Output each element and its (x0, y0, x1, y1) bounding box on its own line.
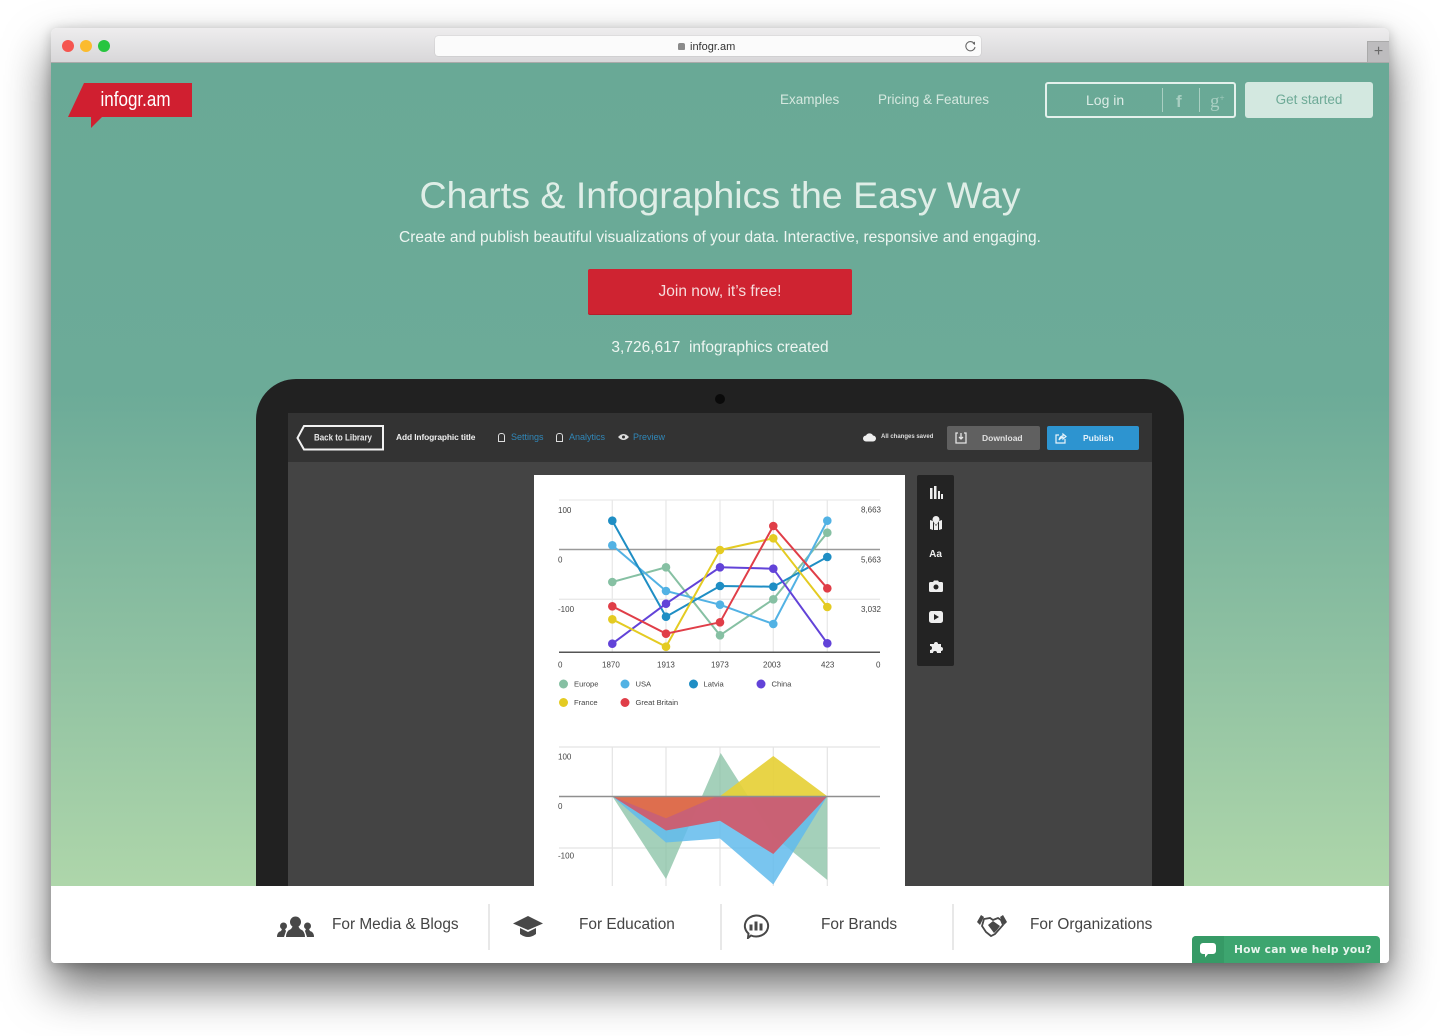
window control: close (62, 40, 74, 52)
area chart axis labels (558, 752, 575, 860)
chart axis labels: 5,663 (861, 556, 882, 564)
icon: puzzle tool (930, 642, 943, 653)
chart axis labels: 8,663 (861, 506, 882, 514)
settings link (498, 432, 544, 442)
series: USA (608, 517, 831, 628)
analytics link (556, 432, 605, 442)
nav divider two (720, 904, 722, 950)
chart axis labels: -100 (558, 605, 575, 614)
get started button (1245, 82, 1373, 118)
chart axis labels: 0 (558, 556, 563, 564)
area chart (558, 746, 880, 886)
chart legend: Great Britain (636, 698, 678, 707)
label: for education: For Education (579, 916, 675, 933)
cloud icon (863, 433, 876, 442)
analytics label: Analytics (569, 432, 605, 442)
back to library button (296, 425, 384, 450)
lock icon (678, 43, 685, 50)
area: USA (612, 796, 827, 884)
series: Europe (608, 529, 831, 639)
publish icon (1055, 432, 1067, 444)
new tab button (1367, 41, 1389, 62)
nav divider one (488, 904, 490, 950)
reload icon (965, 41, 976, 52)
subheadline: Create and publish beautiful visualizations of your data. Interactive, responsive and engaging. (399, 229, 1041, 246)
chart legend: France (574, 698, 598, 707)
chart axis labels: 1870 (602, 660, 620, 670)
area: Great Britain (612, 796, 827, 854)
settings label: Settings (511, 432, 544, 442)
download button (947, 426, 1040, 450)
divider (1162, 88, 1163, 112)
area: France (720, 756, 827, 796)
chart axis labels: 3,032 (861, 605, 882, 614)
webcam (715, 394, 725, 404)
publish label: Publish (1083, 433, 1114, 443)
chart axis labels: 1913 (657, 660, 675, 670)
logo (68, 83, 192, 128)
line chart (558, 500, 882, 707)
chat label: How can we help you? (1234, 943, 1372, 956)
hero section with gradient background (51, 63, 1389, 886)
headline: Charts & Infographics the Easy Way (420, 174, 1020, 216)
nav: pricing and features: Pricing & Features (878, 92, 989, 107)
call to action button (588, 269, 852, 314)
area: Europe (612, 753, 827, 880)
icon: map tool (930, 516, 942, 530)
chart axis labels: 0 (558, 660, 563, 670)
address bar (435, 36, 981, 56)
download label: Download (982, 433, 1023, 443)
chart legend (559, 680, 792, 707)
label: for organizations: For Organizations (1030, 916, 1152, 933)
chart legend: China (772, 680, 792, 688)
chart legend: USA (636, 680, 652, 688)
chart legend: Latvia (704, 680, 725, 688)
icon: organizations handshake (977, 915, 1007, 938)
label: for media and blogs: For Media & Blogs (332, 916, 459, 933)
publish button (1047, 426, 1139, 450)
get started button: Get started (1276, 92, 1342, 107)
chart axis labels (558, 506, 882, 670)
analytics icon (556, 433, 563, 442)
preview label: Preview (633, 432, 665, 442)
back to library button: Back to Library (314, 432, 372, 442)
chart axis labels: 2003 (763, 660, 781, 670)
facebook icon: f (1176, 92, 1182, 111)
series: Latvia (608, 517, 831, 620)
icon: media and blogs people (277, 916, 314, 937)
google plus icon: g+ (1210, 91, 1225, 112)
icon: brands speech chart (744, 914, 770, 939)
audience navigation bar (51, 886, 1389, 963)
download icon (955, 432, 967, 444)
infographics counter: 3,726,617 infographics created (611, 339, 829, 356)
login button group (1045, 82, 1236, 118)
series: Great Britain (608, 522, 831, 638)
divider (1199, 88, 1200, 112)
preview link (618, 432, 665, 442)
saved label: All changes saved (881, 434, 933, 440)
infographic title: Add Infographic title (396, 432, 475, 442)
side tool palette (917, 475, 954, 666)
chart legend: Europe (574, 680, 598, 688)
chart axis labels: 0 (876, 660, 881, 670)
area chart axis labels: 0 (558, 802, 563, 811)
settings icon (498, 433, 505, 442)
icon: video tool (929, 611, 943, 623)
icon: camera tool (929, 580, 943, 592)
new tab button: + (1374, 43, 1383, 60)
app screen (288, 413, 1152, 886)
chart axis labels: 423 (821, 660, 835, 670)
browser title bar (51, 28, 1389, 63)
nav: examples: Examples (780, 92, 839, 107)
area chart axis labels: -100 (558, 852, 575, 860)
nav divider three (952, 904, 954, 950)
window control: minimize (80, 40, 92, 52)
series: China (608, 564, 831, 648)
icon: chart tool (930, 486, 943, 499)
preview icon (618, 434, 629, 440)
logo: infogr.am (100, 89, 170, 111)
laptop mockup (256, 379, 1184, 886)
window control: zoom (98, 40, 110, 52)
area chart axis labels: 100 (558, 752, 572, 762)
icon: education cap (513, 916, 543, 937)
label: for brands: For Brands (821, 916, 897, 933)
icon: text tool: Aa (929, 549, 942, 560)
saved status (863, 433, 933, 442)
url text: infogr.am (690, 41, 735, 53)
chart axis labels: 1973 (711, 660, 729, 670)
area: overlap (612, 796, 717, 818)
app toolbar (288, 413, 1152, 462)
white infographic canvas (534, 475, 905, 886)
chart axis labels: 100 (558, 506, 572, 515)
chat icon (1192, 936, 1224, 963)
series: France (608, 534, 831, 650)
log in label: Log in (1086, 92, 1124, 108)
help chat widget (1192, 936, 1380, 963)
call to action button: Join now, it’s free! (659, 283, 781, 300)
